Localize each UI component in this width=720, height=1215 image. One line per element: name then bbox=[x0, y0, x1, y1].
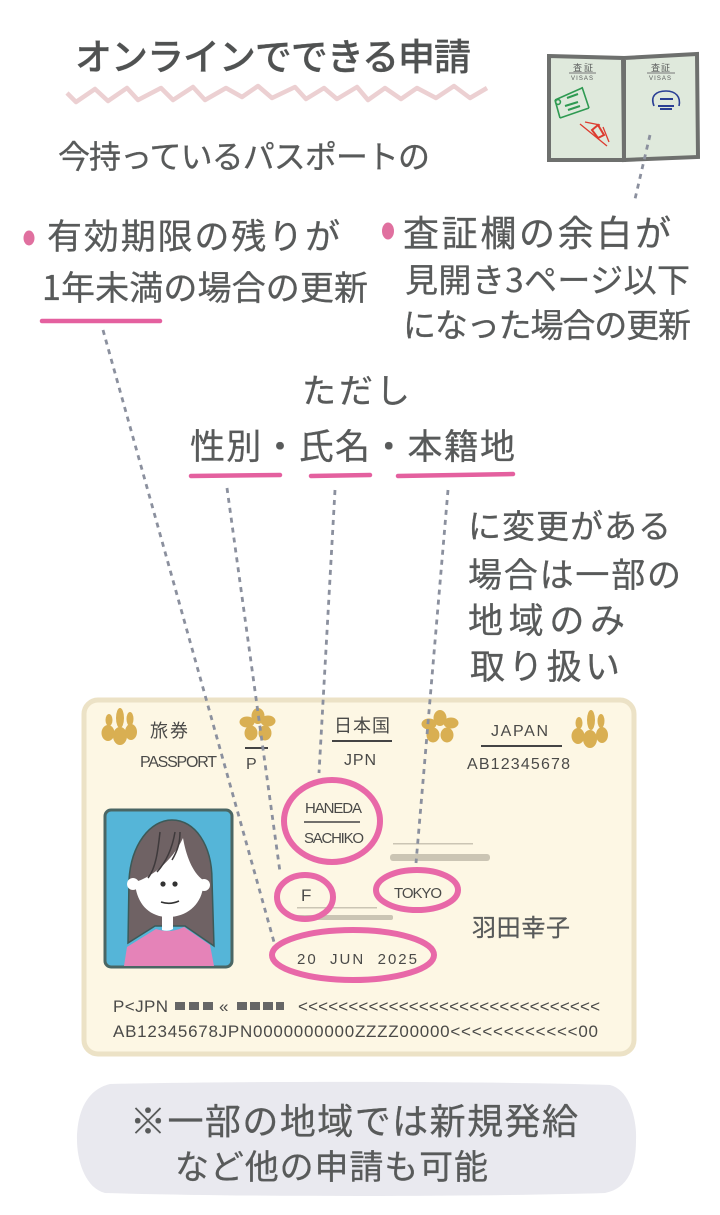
machine readable zone: P<JPN bbox=[113, 997, 168, 1016]
exception text: 性別・氏名・本籍地 bbox=[190, 419, 515, 470]
visa space text: になった場合の更新 bbox=[403, 299, 691, 347]
machine readable zone: <<<<<<<<<<<<<<<<<<<<<<<<<<<<<< bbox=[298, 997, 600, 1016]
validity text: 有効期限の残りが bbox=[47, 209, 340, 260]
passport header text: P bbox=[246, 756, 257, 773]
icon: right flower bbox=[422, 710, 458, 742]
dashed line from visa pages bbox=[635, 135, 650, 199]
name field: SACHIKO bbox=[304, 830, 364, 847]
lead text: 今持っているパスポートの bbox=[58, 132, 430, 178]
exception note bbox=[468, 500, 681, 690]
note text bbox=[130, 1093, 578, 1189]
note text: など他の申請も可能 bbox=[175, 1140, 488, 1189]
left page heading: VISAS bbox=[571, 76, 593, 82]
icon: left flower bbox=[240, 708, 276, 740]
exception text bbox=[190, 364, 515, 470]
passport header text: JAPAN bbox=[491, 723, 548, 740]
portrait photo bbox=[105, 810, 232, 967]
panel: bottom note bbox=[77, 1082, 636, 1196]
domicile field bbox=[376, 870, 458, 910]
title wavy underline bbox=[67, 86, 487, 102]
bullet dot bbox=[382, 222, 394, 240]
visa space text: 査証欄の余白が bbox=[403, 205, 671, 257]
left page heading: 査証 bbox=[573, 61, 593, 74]
exception note: 取り扱い bbox=[470, 639, 620, 690]
right page heading bbox=[647, 61, 675, 82]
exception note: に変更がある bbox=[468, 500, 671, 548]
validity text bbox=[42, 209, 368, 310]
gender field: F bbox=[301, 886, 311, 905]
left page heading bbox=[569, 61, 596, 82]
pink ring: expiry bbox=[272, 930, 434, 980]
machine readable zone: « bbox=[219, 997, 228, 1016]
underline: under one year bbox=[42, 319, 160, 323]
exception text: ただし bbox=[302, 364, 410, 413]
bullet: validity bbox=[24, 209, 368, 310]
bullet dot bbox=[24, 230, 34, 246]
icon: open passport visa pages bbox=[549, 54, 698, 160]
exception note: 地域のみ bbox=[468, 593, 625, 644]
expiry field bbox=[272, 930, 434, 980]
domicile field: TOKYO bbox=[394, 885, 442, 902]
passport header text bbox=[140, 712, 570, 773]
icon: left paulownia mark bbox=[102, 708, 137, 745]
exception note: 場合は一部の bbox=[468, 548, 681, 597]
passport header text: 日本国 bbox=[334, 712, 390, 738]
title: オンラインでできる申請 bbox=[75, 27, 471, 81]
passport header text: PASSPORT bbox=[140, 754, 217, 771]
panel: passport card bbox=[84, 700, 634, 1054]
name field: HANEDA bbox=[305, 800, 362, 817]
icon: right paulownia mark bbox=[572, 710, 608, 748]
gender field bbox=[277, 875, 333, 919]
red stamp bbox=[580, 122, 609, 146]
machine readable zone: AB12345678JPN0000000000ZZZZ00000<<<<<<<<<<<<00 bbox=[113, 1022, 598, 1041]
right page heading: 査証 bbox=[651, 61, 670, 74]
right page heading: VISAS bbox=[649, 76, 671, 82]
expiry field: 20 JUN 2025 bbox=[297, 951, 417, 968]
passport header text: AB12345678 bbox=[467, 756, 570, 773]
dashed leader lines bbox=[103, 330, 448, 942]
blue stamp bbox=[653, 91, 679, 109]
visa space text: 見開き3ページ以下 bbox=[405, 254, 690, 302]
note text: ※一部の地域では新規発給 bbox=[130, 1093, 578, 1145]
signature: 羽田幸子 bbox=[472, 908, 570, 943]
faint print smudges bbox=[293, 843, 490, 920]
passport header text: JPN bbox=[344, 752, 376, 769]
machine readable zone bbox=[113, 997, 600, 1041]
passport header text: 旅券 bbox=[150, 717, 188, 743]
pink ring: gender bbox=[277, 875, 333, 919]
green stamp bbox=[555, 87, 589, 118]
pink ring: name bbox=[284, 780, 380, 862]
pink ring: domicile bbox=[376, 870, 458, 910]
bullet: visa space bbox=[382, 205, 691, 347]
name field bbox=[284, 780, 380, 862]
visa space text bbox=[403, 205, 691, 347]
validity text: 1年未満の場合の更新 bbox=[42, 261, 368, 310]
underlines: gender name domicile bbox=[191, 474, 513, 476]
